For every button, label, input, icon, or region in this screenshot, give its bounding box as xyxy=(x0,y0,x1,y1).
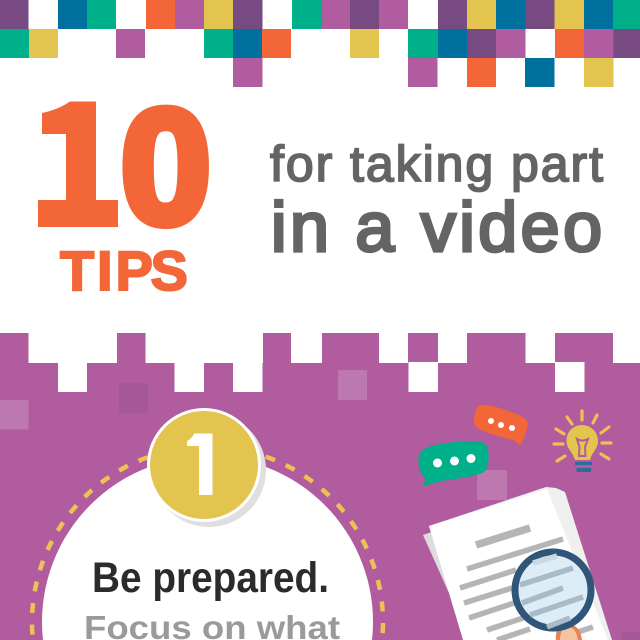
white notches in purple band xyxy=(58,362,584,392)
white tip circle xyxy=(42,456,373,640)
number badge xyxy=(147,408,266,527)
icon: lightbulb xyxy=(554,411,611,472)
icon: green speech bubble xyxy=(418,441,489,486)
paper text lines xyxy=(460,528,593,640)
illustration: documents and magnifying glass xyxy=(423,487,612,640)
subtitle: in a video xyxy=(271,188,602,266)
front paper sheet xyxy=(429,489,608,640)
number badge: 1 xyxy=(179,418,226,512)
magnifying lens xyxy=(515,552,591,628)
subtitle xyxy=(270,136,603,266)
title: 10 tips: 10 xyxy=(28,75,211,258)
heading: be prepared: Be prepared. xyxy=(92,554,329,602)
dashed circle ring xyxy=(32,447,383,640)
lines seen through lens xyxy=(520,556,583,627)
hand holding magnifier xyxy=(556,624,582,640)
pixel mosaic banner xyxy=(0,0,640,87)
icon: orange speech bubble xyxy=(474,405,528,446)
title: 10 tips: TIPS xyxy=(60,239,188,302)
title: 10 tips xyxy=(38,102,209,292)
back paper sheets xyxy=(423,487,612,640)
faint background squares xyxy=(0,370,640,640)
subtitle: for taking part xyxy=(270,136,603,192)
panel: tip 1 purple background xyxy=(0,333,640,640)
